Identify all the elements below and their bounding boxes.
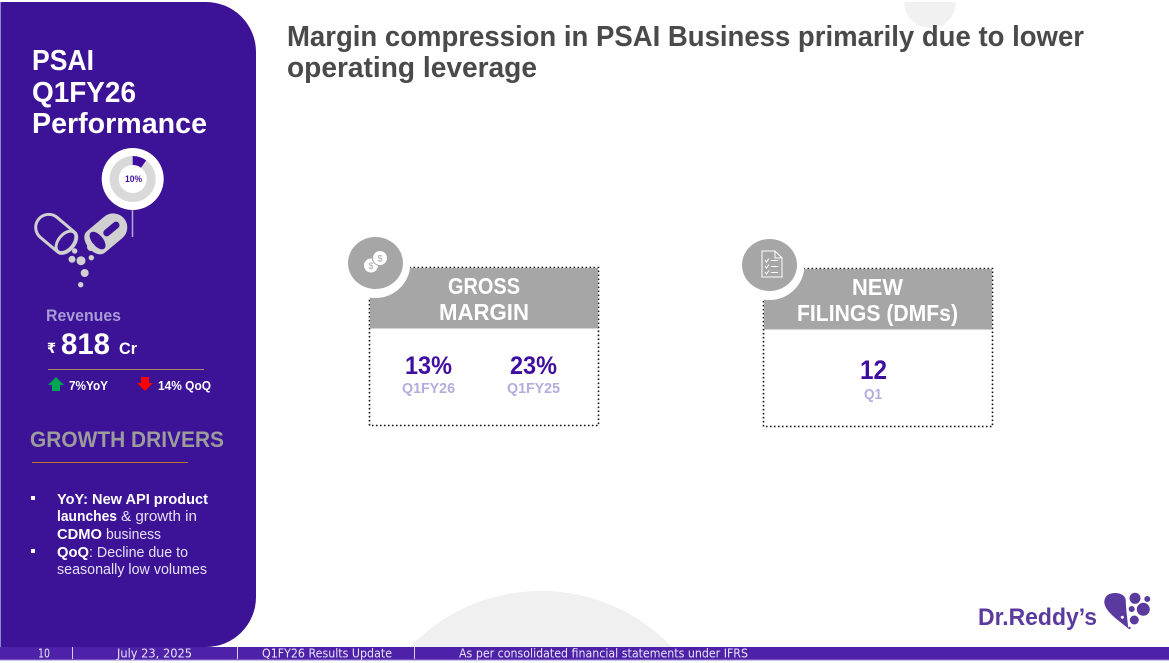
metric: Q1FY26 gross margin: 13%: [405, 352, 452, 380]
growth drivers bullets: QoQ: [57, 544, 89, 561]
title: Margin compression in PSAI Business primarily due to lower: [287, 21, 1084, 53]
icon: checklist document: [742, 239, 797, 291]
logo: Dr. Reddy's: [978, 593, 1150, 631]
title: operating leverage: [287, 52, 537, 84]
icon: coins: $: [368, 261, 374, 271]
metric: Q1FY26 gross margin: [402, 352, 455, 397]
revenues label: Revenues: [46, 306, 121, 325]
revenues value: ₹: [47, 341, 56, 357]
icon: capsule with 10% donut: [30, 148, 164, 287]
sidebar heading: Performance: [32, 108, 207, 140]
new filings heading: [797, 274, 958, 326]
logo: Dr. Reddy's: Dr.Reddy’s: [978, 604, 1097, 631]
sidebar heading: PSAI: [32, 45, 94, 77]
panel: gross margin: [340, 228, 598, 426]
metric: Q1 filings: [860, 355, 887, 403]
sidebar heading: Q1FY26: [32, 77, 136, 109]
footer bar: As per consolidated financial statements under IFRS: [459, 646, 748, 660]
footer bar: July 23, 2025: [116, 646, 192, 660]
metric: Q1 filings: 12: [860, 355, 887, 385]
growth drivers bullets: launches: [57, 508, 117, 525]
growth drivers bullets: seasonally low volumes: [57, 561, 207, 578]
footer bar: Q1FY26 Results Update: [262, 646, 392, 660]
gross margin heading: MARGIN: [439, 299, 529, 325]
decline quarter on quarter: 14% QoQ: [158, 379, 211, 393]
sidebar heading: [32, 45, 207, 140]
metric: Q1FY26 gross margin: Q1FY26: [402, 381, 455, 397]
revenues value: Cr: [119, 339, 137, 358]
growth drivers bullets: YoY: New API product: [57, 491, 208, 508]
growth year on year: 7%YoY: [69, 379, 109, 393]
metric: Q1FY25 gross margin: Q1FY25: [507, 381, 560, 397]
panel: new filings: [734, 230, 992, 426]
icon: capsule with 10% donut: 10%: [125, 174, 142, 184]
title: [287, 21, 1084, 84]
metric: Q1 filings: Q1: [864, 387, 882, 403]
growth year on year: [48, 377, 109, 393]
gross margin heading: [439, 273, 529, 325]
growth drivers bullets: : Decline due to: [89, 544, 188, 561]
new filings heading: FILINGS (DMFs): [797, 300, 958, 326]
footer bar: [0, 646, 1169, 660]
panel: PSAI performance sidebar: [0, 2, 256, 647]
growth drivers bullets: business: [106, 526, 161, 543]
decline quarter on quarter: [137, 377, 211, 393]
icon: coins: $: [378, 254, 383, 264]
revenues value: [47, 328, 137, 361]
growth drivers bullets: CDMO: [57, 526, 102, 543]
growth drivers heading: GROWTH DRIVERS: [30, 427, 224, 452]
new filings heading: NEW: [852, 274, 903, 300]
revenues value: 818: [61, 328, 110, 361]
footer bar: 10: [38, 646, 50, 660]
growth drivers bullets: & growth in: [121, 508, 197, 525]
metric: Q1FY25 gross margin: [507, 352, 560, 397]
growth drivers bullets: [31, 491, 208, 578]
icon: coins: [348, 237, 403, 289]
metric: Q1FY25 gross margin: 23%: [510, 352, 557, 380]
gross margin heading: GROSS: [448, 273, 520, 299]
